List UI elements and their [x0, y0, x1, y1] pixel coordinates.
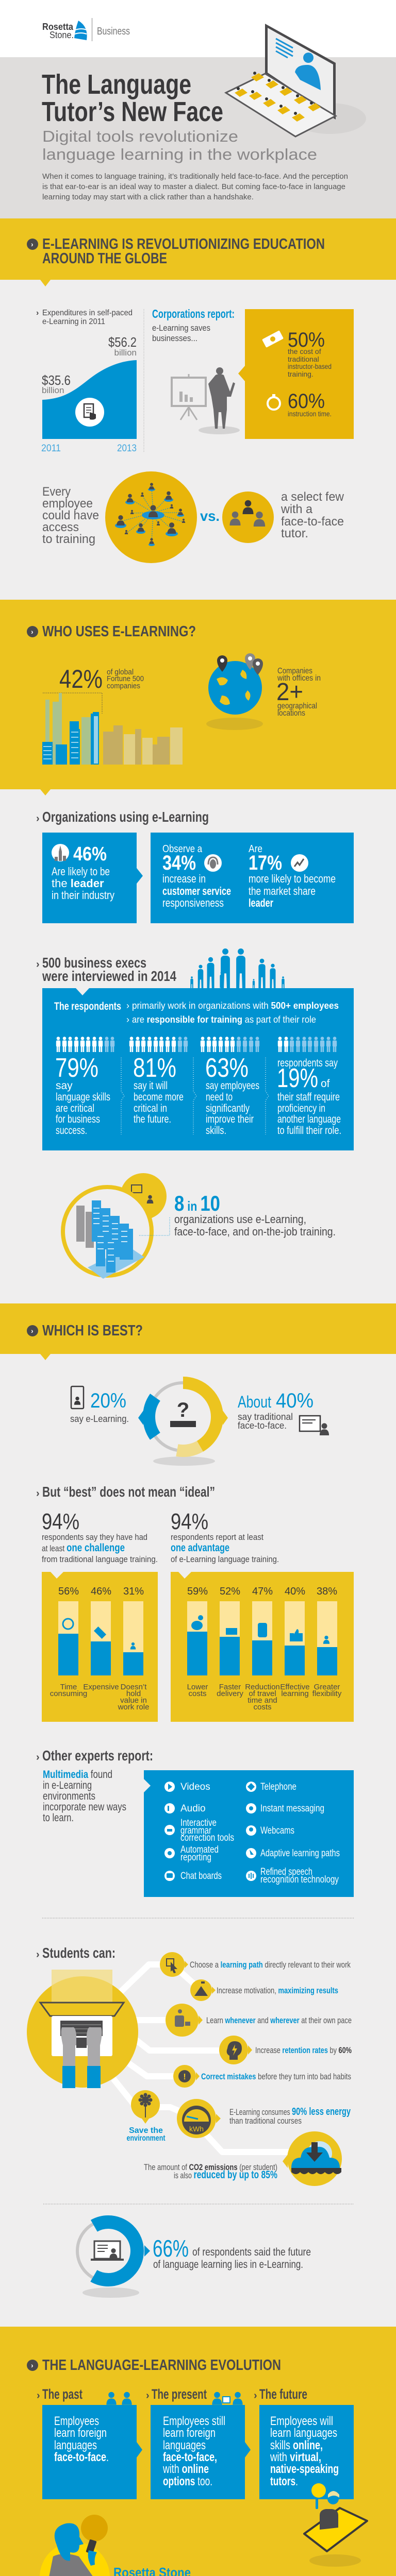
heading: best does not mean ideal: But “best” does not mean “ideal” [42, 1484, 215, 1500]
panel: savings: 50% [288, 329, 325, 351]
panel: multimedia list: Webcams [260, 1825, 294, 1836]
bar chart: advantages: Faster [219, 1683, 241, 1691]
panel: the present: with online [162, 2462, 209, 2476]
logo: Rosetta Stone Business: Stone. [50, 30, 74, 40]
item: learning path [160, 1952, 351, 1977]
corporations report: e-Learning saves [152, 323, 210, 333]
item: retention: Increase retention rates by 60% [255, 2046, 352, 2055]
bar chart: advantages: costs [188, 1689, 207, 1698]
item: save the environment: environment [127, 2134, 166, 2143]
illustration: server racks in ring [63, 1173, 167, 1279]
panel: respondents survey: become more [134, 1091, 184, 1103]
item: retention [219, 2036, 352, 2064]
heading: 500 business execs: 500 business execs [42, 955, 146, 971]
panel: respondents survey: are responsible for training as part of their role [132, 1014, 316, 1025]
chart: expenditures area chart: Expenditures in self-paced [42, 309, 133, 317]
icon rows: people proportions [56, 1037, 337, 1052]
panel: the future: Employees will [270, 2414, 333, 2428]
section band: which is best: › [31, 1327, 34, 1335]
stat: 94% challenge: respondents say they have had [42, 1532, 147, 1542]
bar chart: advantages: 52% [220, 1586, 240, 1597]
heading: organizations using e-learning: › [36, 813, 40, 824]
item: less energy: kWh [189, 2125, 204, 2133]
panel: respondents survey: for business [56, 1113, 100, 1125]
panel: the present: face-to-face, [163, 2450, 217, 2464]
illustration: presenter [172, 367, 240, 434]
bar chart: advantages: 40% [285, 1586, 305, 1597]
chart: expenditures area chart: › [36, 309, 39, 317]
stat: 8 in 10: organizations use e-Learning, [174, 1213, 306, 1226]
panel: the present: › [146, 2390, 150, 2401]
panel: respondents survey: significantly [206, 1103, 250, 1114]
heading: other experts report: Other experts report: [42, 1748, 153, 1764]
stat: 66% future: of respondents said the future [192, 2246, 311, 2258]
illustration: tutor in tablet [304, 2483, 367, 2567]
panel: the past: learn foreign [54, 2426, 107, 2440]
panel: multimedia list: Refined speech [260, 1867, 312, 1877]
panel: respondents survey: 81% [133, 1053, 176, 1083]
panel: savings: training. [288, 370, 314, 378]
panel: the future: skills online, [270, 2438, 323, 2452]
intro paragraph: learning today may start with a click rather than a handshake. [42, 193, 254, 201]
panel: respondents survey: primarily work in organizations with 500+ employees [132, 1001, 339, 1011]
corporations report [152, 307, 235, 343]
panel: respondents survey: to fulfill their role. [277, 1125, 341, 1137]
item: whenever wherever: Learn whenever and wherever at their own pace [206, 2016, 352, 2025]
stat: 20% e-learning: say e-Learning. [70, 1414, 129, 1424]
bar chart: advantages: flexibility [312, 1689, 342, 1698]
stat: 66% future: 66% [153, 2235, 189, 2262]
stat: offices in 2+ locations: 2+ [276, 679, 303, 706]
section band: language-learning evolution: › [31, 2361, 34, 2369]
panel: multimedia list: Adaptive learning paths [260, 1848, 340, 1859]
bar chart: challenges [42, 1572, 158, 1722]
heading: 500 business execs: were interviewed in 2014 [42, 968, 176, 984]
section band: e-learning revolutionizing: › [31, 240, 34, 248]
stat: 40% face-to-face: face-to-face. [238, 1420, 287, 1431]
panel: respondents survey: respondents say [277, 1057, 338, 1069]
stat: offices in 2+ locations: locations [277, 709, 305, 718]
panel: 34% and 17%: customer service [162, 885, 231, 897]
connector lines [113, 1964, 289, 2152]
panel: savings: the cost of [288, 347, 321, 355]
stat: 42% fortune 500: Fortune 500 [107, 674, 144, 683]
panel: multimedia list: Videos [180, 1782, 210, 1792]
panel: respondents survey: say employees [206, 1080, 259, 1092]
chart: expenditures area chart: $56.2 [108, 334, 137, 350]
panel: the present: learn foreign [163, 2426, 216, 2440]
bar chart: advantages: learning [281, 1689, 309, 1698]
text: select few [280, 490, 344, 540]
intro paragraph [42, 172, 348, 201]
bar chart: challenges: 31% [123, 1586, 144, 1597]
panel: the future: learn languages [270, 2426, 337, 2440]
stat: 20% e-learning: 20% [90, 1389, 126, 1412]
icon: face-to-face tutor circle [222, 492, 274, 543]
section band: e-learning revolutionizing [0, 218, 396, 286]
panel: 34% and 17%: 17% [249, 852, 282, 874]
text: every employee [42, 485, 99, 546]
bar chart: challenges: consuming [50, 1689, 87, 1698]
item: motivation: Increase motivation, maximizing results [217, 1986, 338, 1995]
panel: 34% and 17%: 34% [162, 852, 196, 874]
panel: the future: › [254, 2390, 257, 2401]
panel: multimedia list: grammar [180, 1825, 212, 1836]
panel: respondents survey: say it will [134, 1080, 168, 1092]
chart: which is best donut: ? [177, 1399, 189, 1421]
panel: the present: languages [163, 2438, 206, 2452]
panel: the past: › [37, 2390, 40, 2401]
stat: offices in 2+ locations: Companies [277, 667, 312, 675]
text: select few: tutor. [281, 527, 308, 540]
stat: 94% advantage: of e-Learning language training. [171, 1554, 279, 1564]
panel: respondents survey: are critical [56, 1103, 94, 1114]
bar chart: advantages: time and [248, 1696, 277, 1705]
bar chart: challenges: Doesn’t [121, 1683, 147, 1691]
stat: 40% face-to-face: About [238, 1393, 271, 1411]
stat: 20% e-learning [70, 1386, 129, 1424]
panel: the past: The past [42, 2386, 82, 2402]
panel: respondents survey: say [56, 1080, 73, 1092]
stat: 94% challenge: from traditional language training. [42, 1554, 158, 1564]
heading: students can: › [36, 1949, 40, 1960]
bar chart: challenges: Time [60, 1683, 77, 1691]
chart: expenditures area chart: billion [42, 385, 64, 395]
stat: 94% advantage: 94% [171, 1509, 208, 1534]
logo: Rosetta Stone Business: Business [97, 26, 130, 37]
heading: other experts report: › [36, 1752, 40, 1763]
bar chart: challenges: value in [120, 1696, 147, 1705]
heading: organizations using e-learning: Organizations using e-Learning [42, 809, 209, 825]
panel: 34% and 17%: more likely to become [249, 872, 336, 885]
panel: the present [146, 2386, 251, 2499]
item: less energy: E-Learning consumes 90% less energy [229, 2106, 351, 2117]
title [42, 69, 223, 127]
panel: 34% and 17%: Observe a [162, 843, 203, 855]
item: whenever wherever [166, 2004, 352, 2037]
stat: 42% fortune 500: of global [107, 668, 134, 676]
bar chart: challenges: 46% [91, 1586, 111, 1597]
stat: 40% face-to-face [238, 1389, 329, 1435]
panel: the future: native-speaking [270, 2462, 339, 2476]
panel: respondents survey: 19% [277, 1063, 318, 1093]
stat: 42% fortune 500 [43, 665, 144, 714]
section band: e-learning revolutionizing: E-LEARNING IS REVOLUTIONIZING EDUCATION [42, 236, 325, 252]
panel: multimedia list: Automated [180, 1844, 219, 1855]
bar chart: advantages: 38% [317, 1586, 337, 1597]
panel: 34% and 17%: the market share [249, 885, 316, 897]
corporations report: Corporations report: [152, 307, 235, 320]
header background [0, 0, 396, 57]
panel: the future [254, 2386, 354, 2499]
panel: respondents survey: success. [56, 1125, 87, 1137]
section band: who uses e-learning [0, 600, 396, 795]
item: less energy [177, 2099, 351, 2138]
panel: 46% leader: 46% [73, 843, 107, 865]
panel: multimedia list: Chat boards [180, 1871, 222, 1882]
chart: expenditures area chart: $35.6 [42, 372, 71, 388]
panel: the future: tutors. [270, 2475, 298, 2488]
illustration: executives group [190, 948, 285, 989]
intro paragraph: is that ear-to-ear is an ideal way to master a dialect. But coming face-to-face in language [42, 182, 345, 191]
panel: respondents survey: › [126, 1001, 129, 1011]
heading: students can: Students can: [42, 1945, 116, 1961]
heading: 500 business execs: › [36, 959, 40, 970]
item: correct mistakes: Correct mistakes before they turn into bad habits [201, 2072, 351, 2081]
chart: expenditures area chart: billion [114, 348, 137, 358]
subtitle: Digital tools revolutionize [42, 127, 238, 145]
panel: respondents survey [42, 988, 354, 1150]
bar chart: advantages: Effective [280, 1683, 310, 1691]
panel: respondents survey: 63% [205, 1053, 249, 1083]
panel: respondents survey: skills. [206, 1125, 226, 1137]
panel: respondents survey: critical in [134, 1103, 167, 1114]
panel: 46% leader: in their industry [52, 889, 114, 902]
item: save the environment: Save the [129, 2126, 163, 2135]
panel: respondents survey: › [126, 1014, 129, 1025]
panel: 46% leader: Are likely to be [52, 865, 110, 878]
text: select few: a select few [281, 490, 344, 504]
icon: network circle [105, 471, 197, 563]
heading: best does not mean ideal: › [36, 1488, 40, 1499]
panel: the present: Employees still [163, 2414, 225, 2428]
logo: Rosetta Stone Business: Rosetta [42, 22, 74, 32]
text: select few: with a [280, 502, 313, 516]
panel: the present: The present [152, 2386, 207, 2402]
bar chart: advantages: Reduction [245, 1683, 280, 1691]
panel: 34% and 17%: leader [249, 896, 273, 909]
panel: 34% and 17%: responsiveness [162, 896, 224, 909]
stat: 94% challenge [42, 1509, 158, 1564]
panel: respondents survey: language skills [56, 1091, 110, 1103]
corporations report: businesses... [152, 333, 197, 343]
item: correct mistakes: ! [183, 2073, 186, 2081]
panel: the past: Employees [54, 2414, 99, 2428]
illustration: laptop hands [27, 1970, 138, 2088]
bar chart: challenges: 56% [58, 1586, 79, 1597]
subtitle: language learning in the workplace [42, 145, 317, 163]
stat: 94% challenge: at least one challenge [42, 1542, 125, 1554]
text: vs.: vs. [200, 508, 220, 524]
heading: 500 business execs [36, 955, 176, 984]
stat: 42% fortune 500: companies [107, 682, 140, 690]
text: every employee: Every [42, 485, 71, 499]
panel: respondents survey: their staff require [277, 1091, 340, 1103]
stat: 94% advantage: respondents report at least [171, 1532, 263, 1542]
panel: 46% leader [42, 833, 143, 923]
panel: multimedia list: reporting [180, 1852, 211, 1863]
panel: respondents survey: improve their [206, 1113, 254, 1125]
subtitle [42, 127, 317, 163]
stat: 94% advantage: one advantage [171, 1542, 229, 1554]
bar chart: advantages: 47% [252, 1586, 273, 1597]
panel: the past: face-to-face. [54, 2450, 109, 2464]
panel: the future: with virtual, [270, 2450, 321, 2464]
text: every employee: to training [42, 532, 95, 546]
panel: 34% and 17%: increase in [162, 872, 206, 885]
stat: 66% future [153, 2235, 311, 2270]
section band: e-learning revolutionizing: AROUND THE GLOBE [42, 250, 167, 267]
section band: who uses e-learning: › [31, 628, 34, 636]
stat: offices in 2+ locations: geographical [277, 702, 317, 710]
stat: 66% future: of language learning lies in e-Learning. [153, 2259, 303, 2270]
bar chart: challenges: hold [126, 1689, 141, 1698]
panel: the past [37, 2386, 142, 2499]
panel: savings: 60% [288, 390, 325, 413]
panel: 34% and 17%: Are [249, 843, 262, 855]
text: every employee: could have [42, 509, 99, 522]
panel: multimedia list: Audio [180, 1803, 206, 1814]
panel: multimedia list: Interactive [180, 1818, 217, 1828]
section band: which is best: WHICH IS BEST? [42, 1323, 143, 1339]
illustration: laptop classroom [226, 24, 366, 137]
panel: savings: traditional [288, 355, 319, 363]
panel: multimedia list: recognition technology [260, 1874, 339, 1885]
chart: expenditures area chart: e-Learning in 2011 [42, 317, 105, 326]
bar chart: advantages: 59% [187, 1586, 208, 1597]
bar chart: challenges: work role [118, 1703, 149, 1711]
panel: multimedia list: Instant messaging [260, 1803, 324, 1814]
panel: respondents survey: The respondents [54, 1001, 121, 1012]
stat: 42% fortune 500: 42% [59, 665, 103, 693]
item: correct mistakes [173, 2065, 351, 2088]
item: co2 emissions: The amount of CO2 emissions (per student) [144, 2163, 277, 2172]
text: multimedia: Multimedia found [43, 1769, 112, 1781]
stat: 8 in 10: 8 in 10 [174, 1191, 220, 1215]
panel: savings: instructor-based [288, 362, 332, 370]
stat: offices in 2+ locations [276, 667, 321, 718]
title: The Language [42, 69, 191, 100]
panel: 34% and 17% [151, 833, 354, 923]
item: less energy: than traditional courses [229, 2116, 302, 2126]
panel: respondents survey: another language [277, 1113, 341, 1125]
bar chart: advantages: Lower [187, 1683, 208, 1691]
panel: multimedia list [144, 1770, 354, 1897]
item: learning path: Choose a learning path directly relevant to their work [190, 1960, 351, 1970]
stat: 40% face-to-face: say traditional [238, 1412, 293, 1422]
panel: 46% leader: the leader [52, 877, 104, 890]
text: multimedia: to learn. [43, 1812, 74, 1824]
panel: respondents survey: proficiency in [277, 1103, 325, 1114]
text: every employee: access [42, 520, 79, 534]
section band: who uses e-learning: WHO USES E-LEARNING? [42, 623, 196, 640]
text: select few: face-to-face [281, 515, 344, 529]
panel: multimedia list: Telephone [260, 1782, 296, 1792]
stat: 94% challenge: 94% [42, 1509, 79, 1534]
text: every employee: employee [42, 497, 93, 511]
chart: expenditures area chart [36, 309, 137, 454]
title: Tutor’s New Face [42, 96, 223, 127]
panel: multimedia list: correction tools [180, 1833, 234, 1843]
chart: expenditures area chart: 2011 [41, 443, 61, 454]
section band: language-learning evolution [0, 2327, 396, 2576]
panel: savings: instruction time. [288, 410, 332, 418]
chart: expenditures area chart: 2013 [117, 443, 137, 454]
illustration: globe with pins [206, 653, 263, 730]
panel: the future: The future [259, 2386, 307, 2402]
panel: respondents survey: of [321, 1078, 330, 1090]
illustration: city skyline [42, 693, 183, 765]
item: co2 emissions: is also reduced by up to 85% [174, 2169, 277, 2181]
chart: which is best donut [138, 1383, 228, 1466]
panel: savings [238, 309, 354, 439]
chart: 66% donut [77, 2220, 150, 2298]
logo: Rosetta Stone Business [42, 18, 130, 41]
stat: 94% advantage [171, 1509, 279, 1564]
panel: respondents survey: 79% [55, 1053, 98, 1083]
stat: offices in 2+ locations: with offices in [277, 674, 321, 683]
item: co2 emissions [144, 2131, 342, 2186]
illustration: man with phone [40, 2515, 110, 2576]
stat: 8 in 10 [139, 1191, 336, 1238]
panel: respondents survey: need to [206, 1091, 233, 1103]
bar chart: advantages: delivery [217, 1689, 243, 1698]
bar chart: challenges: Expensive [83, 1683, 119, 1691]
stat: 40% face-to-face: 40% [276, 1389, 314, 1412]
text: multimedia: incorporate new ways [43, 1801, 126, 1813]
bar chart: advantages [171, 1572, 354, 1722]
intro paragraph: When it comes to language training, it’s traditionally held face-to-face. And the perception [42, 172, 348, 181]
bar chart: advantages: Greater [314, 1683, 340, 1691]
panel: the past: languages [54, 2438, 97, 2452]
section band: which is best [0, 1303, 396, 1360]
panel: the present: options too. [163, 2475, 212, 2488]
item: save the environment [127, 2090, 166, 2143]
item: motivation [190, 1979, 338, 2001]
text: multimedia: environments [43, 1790, 95, 1802]
text: multimedia [43, 1769, 126, 1824]
bar chart: advantages: costs [253, 1703, 272, 1711]
section band: language-learning evolution: THE LANGUAGE-LEARNING EVOLUTION [42, 2357, 281, 2374]
bar chart: advantages: of travel [249, 1689, 276, 1698]
text: multimedia: in e-Learning [43, 1780, 92, 1791]
stat: 8 in 10: face-to-face, and on-the-job training. [174, 1225, 336, 1238]
panel: respondents survey: the future. [134, 1113, 171, 1125]
